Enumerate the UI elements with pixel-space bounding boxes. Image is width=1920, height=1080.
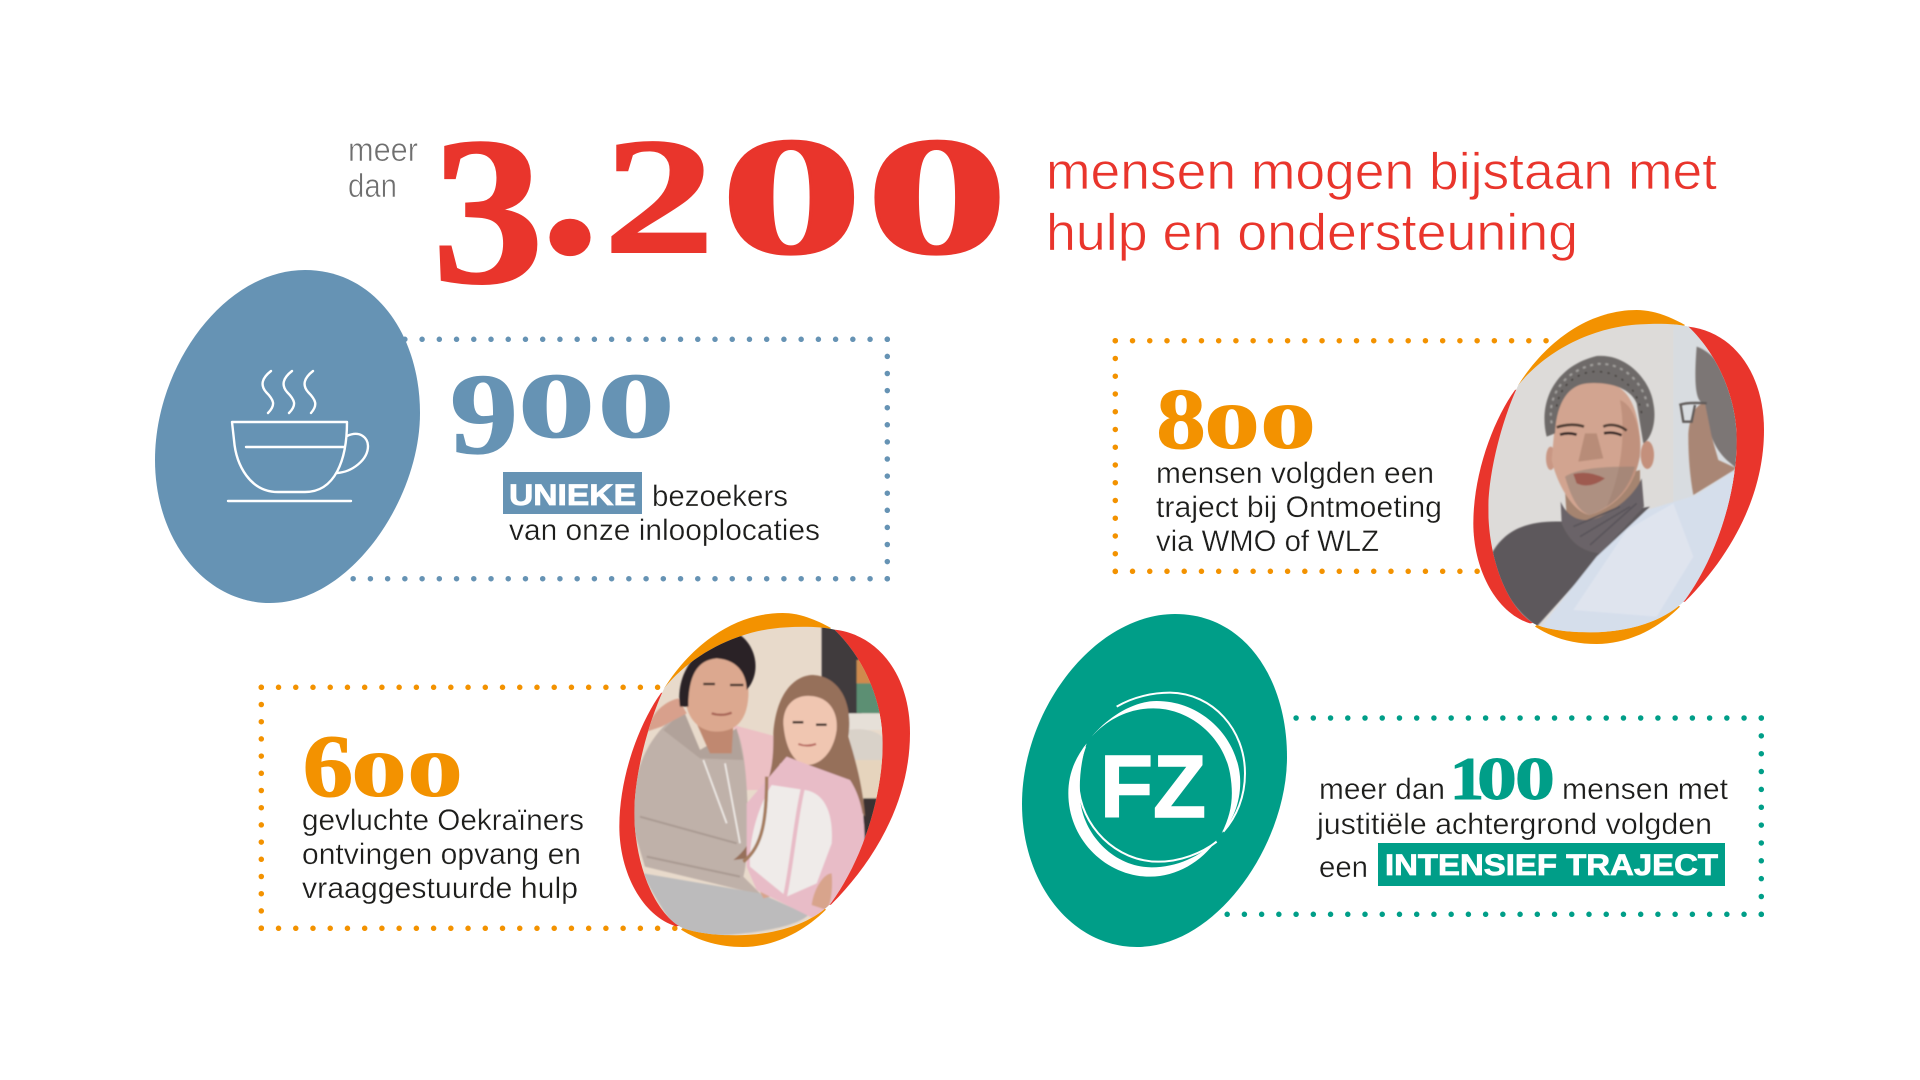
head xyxy=(1546,447,1555,470)
number: 800: 8 xyxy=(1156,372,1206,468)
big number: 3.200 xyxy=(432,58,1009,329)
dotted frame: orange xyxy=(1115,341,1550,572)
photo: man in conversation xyxy=(1473,310,1773,644)
dotted frame: teal xyxy=(1220,718,1761,915)
number: 800: 0 xyxy=(1204,392,1260,462)
shirt xyxy=(1540,470,1735,632)
text: meer dan 100: 0 xyxy=(1477,746,1517,813)
number: 600: 0 xyxy=(407,740,463,810)
intro text: meer dan: meer xyxy=(348,131,418,168)
hair xyxy=(1544,356,1654,443)
photo: mother and daughter xyxy=(619,613,919,947)
number: 600 xyxy=(303,717,463,816)
panel: 900 bezoekers xyxy=(155,270,887,603)
text: meer dan 100: 1 xyxy=(1450,745,1484,812)
text: traject: traject bij Ontmoeting xyxy=(1156,491,1442,524)
text: opvang: gevluchte Oekraïners xyxy=(302,804,584,837)
text: meer dan 100 xyxy=(1316,745,1729,884)
text: traject xyxy=(1156,457,1442,558)
intro text: meer dan xyxy=(348,131,418,204)
panel: 800 mensen xyxy=(1115,310,1773,644)
blob: teal xyxy=(1022,614,1287,947)
number: 600: 0 xyxy=(351,740,407,810)
number: 800 xyxy=(1156,372,1316,468)
number: 900: 0 xyxy=(518,354,595,457)
tag: INTENSIEF TRAJECT xyxy=(1378,843,1725,886)
number: 900 xyxy=(450,351,675,479)
text: bezoekers xyxy=(509,480,820,547)
tag: UNIEKE: UNIEKE xyxy=(509,479,636,512)
number: 600: 6 xyxy=(303,717,353,816)
big number: 3.200: 0 xyxy=(865,102,1009,290)
text: meer dan 100: 0 xyxy=(1515,746,1555,813)
intro text: meer dan: dan xyxy=(348,167,397,204)
girl xyxy=(733,675,865,860)
text: bezoekers: van onze inlooplocaties xyxy=(509,514,820,547)
icon: coffee cup xyxy=(228,371,368,501)
text: bezoekers: bezoekers xyxy=(652,480,788,513)
big number: 3.200: 2 xyxy=(603,105,715,288)
text: meer dan 100: meer dan xyxy=(1319,773,1445,806)
dotted frame: blue xyxy=(350,339,887,579)
icon: FZ logo xyxy=(1068,693,1245,877)
panel: FZ 100 mensen xyxy=(1022,614,1761,947)
heading text: hulp en ondersteuning xyxy=(1046,204,1578,262)
sweater and neck xyxy=(1490,507,1650,627)
back man xyxy=(1695,347,1738,470)
dotted frame: orange xyxy=(261,687,680,929)
big number: 3.200: 3 xyxy=(432,95,544,329)
big number: 3.200: . xyxy=(540,58,600,300)
text: meer dan 100: justitiële achtergrond volgden xyxy=(1316,808,1712,841)
number: 900: 9 xyxy=(450,351,518,479)
text: meer dan 100: mensen met xyxy=(1562,773,1729,806)
heading text: mensen mogen bijstaan met xyxy=(1046,143,1718,201)
text: opvang xyxy=(302,804,584,905)
number: 900: 0 xyxy=(597,354,675,457)
panel: 600 Oekrainers xyxy=(261,613,919,947)
big number: 3.200: 0 xyxy=(720,102,863,290)
blob: blue xyxy=(155,270,420,603)
features xyxy=(1557,425,1584,427)
number: 800: 0 xyxy=(1260,392,1316,462)
text: traject: via WMO of WLZ xyxy=(1156,525,1379,558)
icon: FZ logo: FZ xyxy=(1100,737,1206,836)
tag: INTENSIEF TRAJECT: INTENSIEF TRAJECT xyxy=(1385,849,1718,882)
text: opvang: vraaggestuurde hulp xyxy=(302,872,578,905)
text: meer dan 100: een xyxy=(1319,851,1368,884)
text: opvang: ontvingen opvang en xyxy=(302,838,581,871)
tag: UNIEKE xyxy=(503,472,642,514)
heading text xyxy=(1046,143,1718,262)
text: traject: mensen volgden een xyxy=(1156,457,1434,490)
